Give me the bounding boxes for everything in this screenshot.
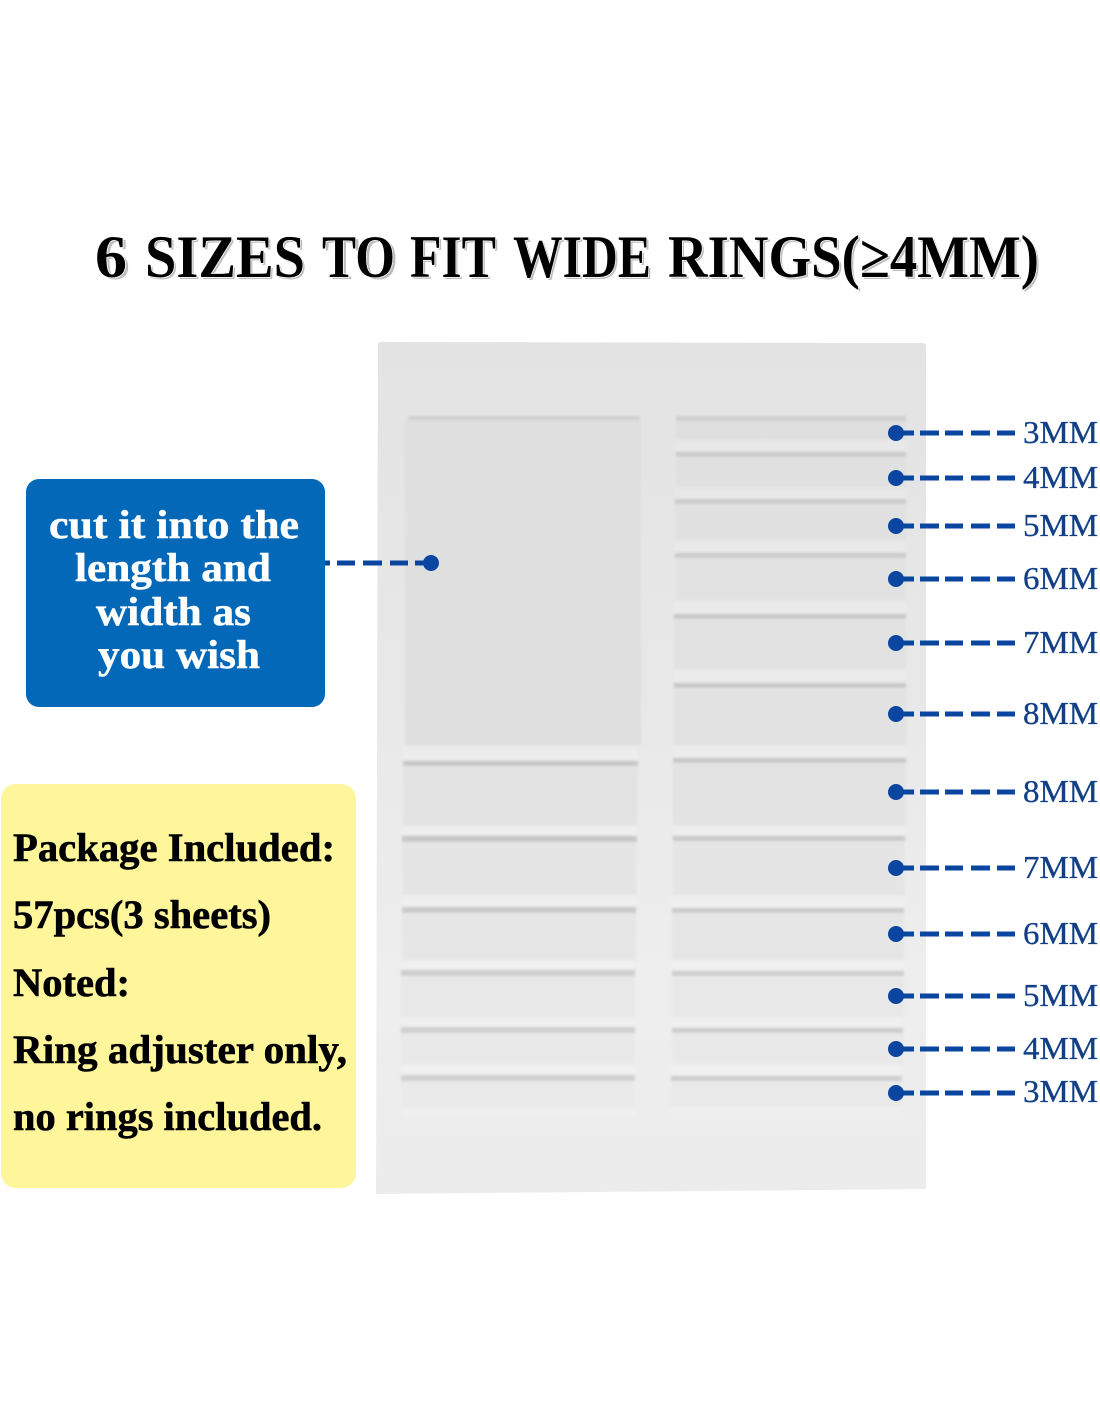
title: SIZES [145, 224, 305, 290]
marker: 7MM top [888, 624, 1098, 660]
marker: 6MM bottom [888, 915, 1098, 951]
panel: package note [1, 784, 356, 1188]
panel: package note: Package Included: [13, 825, 335, 870]
marker: 4MM top: 4MM [1023, 459, 1098, 495]
marker: 5MM bottom: 5MM [1023, 977, 1098, 1013]
title: FIT [410, 224, 496, 290]
marker: 8MM bottom [888, 773, 1098, 809]
marker: 4MM top [888, 459, 1098, 495]
right column strips [671, 416, 906, 1114]
arrow: callout to large pad [325, 555, 439, 571]
panel: package note: Noted: [13, 960, 130, 1005]
title [95, 224, 1041, 292]
marker: 7MM top: 7MM [1023, 624, 1098, 660]
panel: package note: no rings included. [13, 1094, 322, 1139]
marker: 3MM bottom [888, 1073, 1098, 1109]
title: WIDE [515, 226, 653, 292]
marker: 8MM top [888, 695, 1098, 731]
title: TO [322, 224, 395, 290]
title: SIZES [147, 226, 307, 292]
marker: 3MM bottom: 3MM [1023, 1073, 1098, 1109]
marker: 3MM top [888, 414, 1098, 450]
marker: 6MM top [888, 560, 1098, 596]
large cut-to-size pad [405, 416, 641, 745]
title: WIDE [513, 224, 651, 290]
title: 6 [95, 224, 127, 290]
left column strips [401, 748, 638, 1116]
callout: cut to size [26, 479, 325, 707]
title: RINGS(≥4MM) [668, 224, 1039, 290]
title: FIT [412, 226, 498, 292]
marker: 5MM top: 5MM [1023, 507, 1098, 543]
title: TO [325, 226, 398, 292]
callout: cut to size: width as [96, 589, 251, 634]
marker: 7MM bottom: 7MM [1023, 849, 1098, 885]
panel: adjuster sheet [376, 342, 926, 1194]
marker: 5MM top [888, 507, 1098, 543]
marker: 7MM bottom [888, 849, 1098, 885]
callout: cut to size: you wish [98, 632, 260, 677]
title: 6 [98, 226, 130, 292]
marker: 3MM top: 3MM [1023, 414, 1098, 450]
callout: cut to size: length and [75, 545, 271, 590]
marker: 4MM bottom [888, 1030, 1098, 1066]
callout: cut to size: cut it into the [49, 502, 299, 547]
marker: 8MM bottom: 8MM [1023, 773, 1098, 809]
marker: 6MM bottom: 6MM [1023, 915, 1098, 951]
panel: package note: Ring adjuster only, [13, 1027, 347, 1072]
size markers [888, 414, 1098, 1109]
title: RINGS(≥4MM) [670, 226, 1041, 292]
marker: 8MM top: 8MM [1023, 695, 1098, 731]
marker: 5MM bottom [888, 977, 1098, 1013]
panel: package note: 57pcs(3 sheets) [13, 892, 271, 937]
marker: 4MM bottom: 4MM [1023, 1030, 1098, 1066]
marker: 6MM top: 6MM [1023, 560, 1098, 596]
